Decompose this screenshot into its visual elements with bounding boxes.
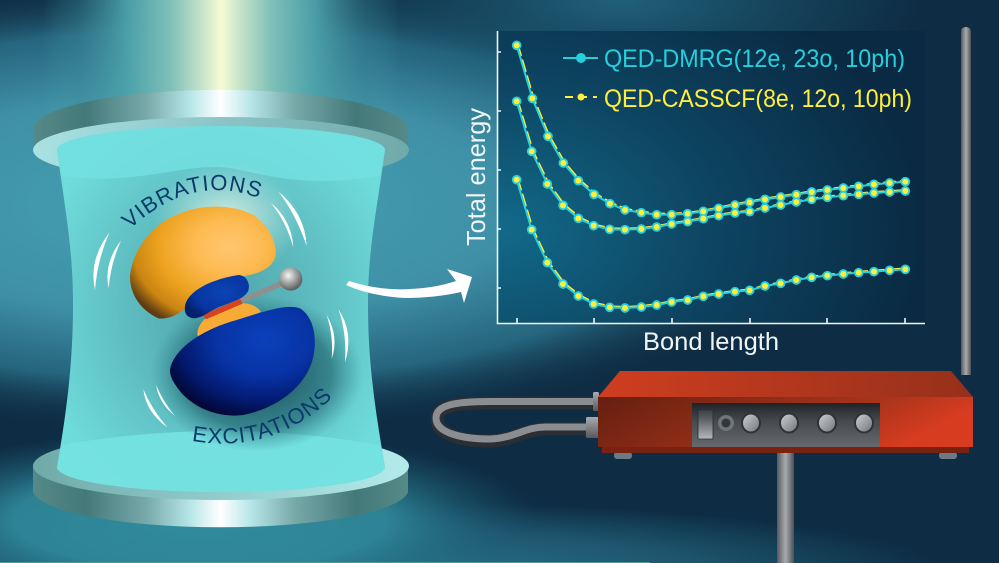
jack — [718, 415, 734, 431]
chart axes — [497, 31, 925, 324]
data point markers — [517, 45, 905, 308]
arrow — [346, 269, 472, 303]
red instrument box — [598, 371, 973, 459]
legend: QED-DMRG: QED-DMRG(12e, 23o, 10ph) — [604, 45, 905, 73]
motion marks — [93, 192, 348, 427]
stand rod upper — [961, 27, 971, 375]
glass cylinder — [57, 126, 385, 492]
orbital illustration — [93, 168, 358, 448]
switch — [698, 410, 713, 439]
x axis title: Bond length — [643, 328, 779, 356]
legend: QED-CASSCF: QED-CASSCF(8e, 12o, 10ph) — [604, 85, 912, 113]
y axis title: Total energy — [461, 108, 491, 246]
orbital: blue ring — [185, 275, 249, 318]
cable connectors — [586, 392, 599, 438]
line chart: energy curves — [517, 44, 906, 308]
chart panel — [461, 31, 925, 356]
orbital: upper yellow lobe — [130, 207, 276, 318]
cyan curves — [517, 45, 905, 308]
label: vibrations: VIBRATIONS — [120, 174, 262, 226]
control panel — [692, 403, 880, 447]
yellow dashed curves — [518, 44, 906, 307]
icon: metal bond and atom — [240, 267, 302, 301]
box base strip — [602, 447, 969, 453]
box feet — [614, 452, 957, 459]
knobs — [742, 414, 873, 432]
orbital: small yellow lobe — [197, 303, 261, 340]
orbital: lower blue lobe — [170, 307, 315, 416]
cables — [436, 402, 595, 441]
legend — [563, 45, 912, 113]
light beam — [42, 0, 400, 140]
label: excitations: EXCITATIONS — [193, 388, 330, 444]
stand rod lower — [777, 450, 794, 563]
box front face — [598, 397, 973, 447]
box top face — [598, 371, 973, 397]
bottom metal disc — [33, 432, 409, 527]
top metal disc — [33, 90, 409, 183]
orbital: red band — [203, 299, 243, 319]
